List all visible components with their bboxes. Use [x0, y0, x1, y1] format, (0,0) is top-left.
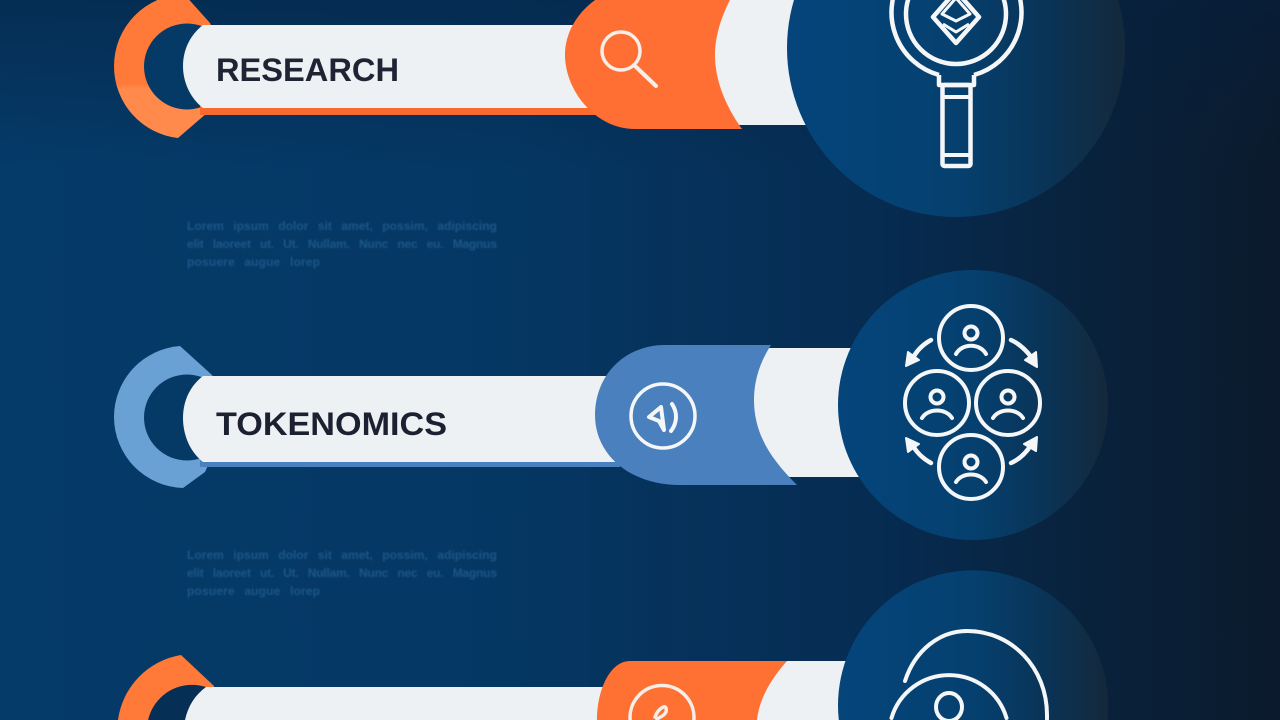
tokenomics blue tab — [595, 345, 797, 485]
research accent strip — [200, 106, 600, 115]
icon: search — [602, 32, 656, 86]
person right — [976, 371, 1040, 435]
body text: second paragraph — [187, 548, 497, 598]
body text: first paragraph: Lorem ipsum dolor sit amet, possim, adipiscing — [187, 219, 497, 233]
person bottom — [939, 435, 1003, 499]
icon: speaker in circle — [631, 384, 695, 448]
research connector band — [700, 0, 830, 125]
tokenomics ring — [114, 346, 230, 488]
research disc — [787, 0, 1125, 217]
research ring — [114, 0, 230, 138]
icon: magnifier with ethereum diamond — [892, 0, 1022, 166]
tokenomics disc — [838, 270, 1108, 540]
third disc — [838, 570, 1108, 720]
panel: third row — [118, 570, 1108, 720]
panel: tokenomics row — [114, 270, 1108, 540]
body text: second paragraph: Lorem ipsum dolor sit amet, possim, adipiscing — [187, 548, 497, 562]
research orange tab — [565, 0, 742, 129]
body text: first paragraph — [187, 219, 497, 269]
body text: first paragraph: elit laoreet ut. Ut. Nullam. Nunc nec eu. Magnus — [187, 237, 497, 251]
third orange tab — [597, 661, 787, 720]
icon: concentric profile rings — [892, 631, 1047, 720]
person left — [905, 371, 969, 435]
research label bar — [183, 25, 590, 108]
third ring — [118, 655, 236, 720]
person top — [939, 306, 1003, 370]
third connector band — [745, 661, 875, 720]
third label bar — [185, 687, 610, 720]
body text: first paragraph: posuere augue lorep — [187, 255, 320, 269]
icon: community of four people with arrows — [905, 306, 1040, 499]
arrows — [906, 340, 1037, 463]
tokenomics accent strip — [200, 460, 620, 467]
panel: research row — [114, 0, 1125, 217]
body text: second paragraph: elit laoreet ut. Ut. Nullam. Nunc nec eu. Magnus — [187, 566, 497, 580]
research heading: RESEARCH — [216, 52, 399, 88]
body text: second paragraph: posuere augue lorep — [187, 584, 320, 598]
icon: third tab emblem — [630, 685, 694, 720]
tokenomics heading: TOKENOMICS — [216, 406, 447, 442]
tokenomics connector band — [745, 348, 875, 477]
tokenomics label bar — [183, 376, 615, 462]
